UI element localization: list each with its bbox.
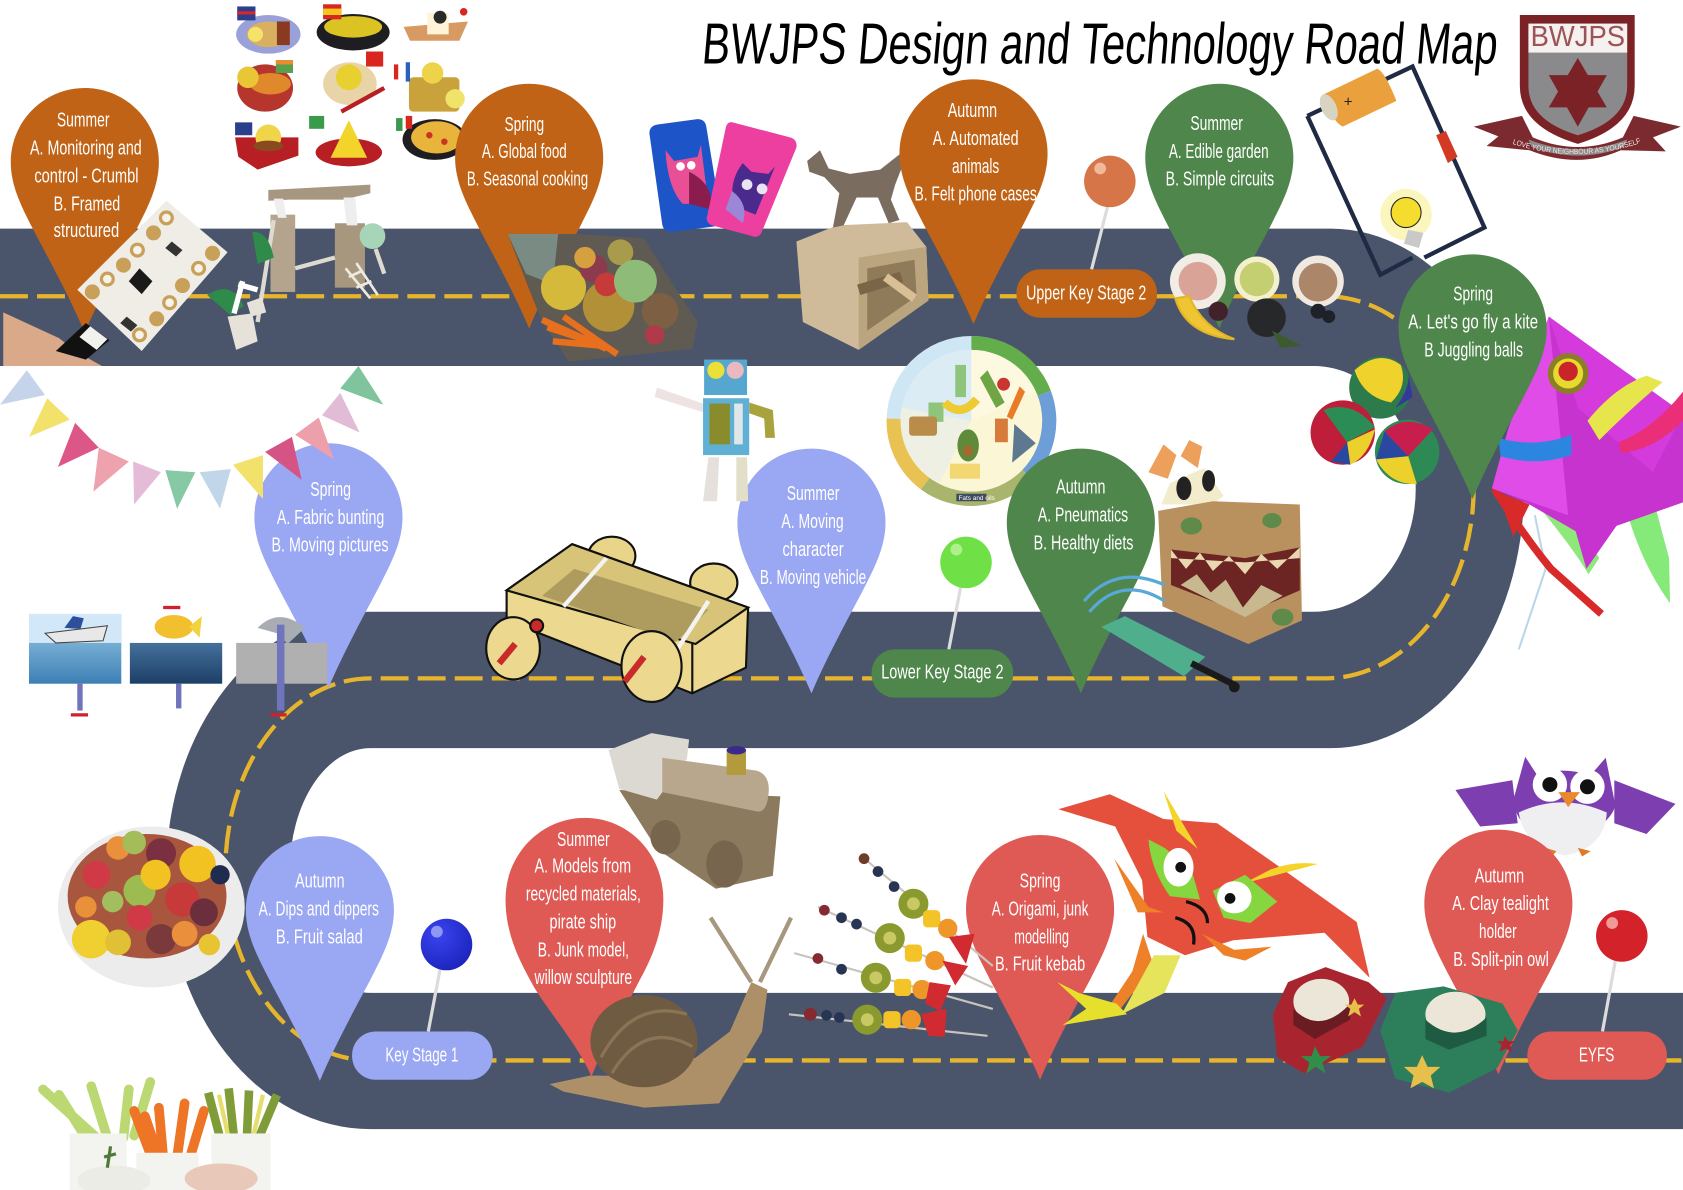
label: key stage 1: Key Stage 1 — [385, 1045, 458, 1067]
image: moving pictures panels — [29, 608, 327, 715]
skewer 1 — [859, 853, 993, 966]
image: willow snail — [550, 918, 791, 1108]
star of David — [1549, 58, 1607, 127]
logo motto: LOVE YOUR NEIGHBOUR AS YOURSELF — [1512, 138, 1640, 154]
image: crumbl board and hand — [3, 201, 228, 366]
pin: lower KS2 spring green: A. Let's go fly a kite — [1408, 311, 1538, 333]
school logo — [1474, 15, 1681, 160]
pin: EYFS spring red — [966, 835, 1114, 1080]
image: fruit bowl — [58, 826, 245, 987]
pin: upper KS2 autumn: A. Automated — [933, 128, 1019, 150]
pin: upper KS2 autumn — [899, 79, 1048, 324]
battery: + — [1344, 93, 1353, 110]
pin: upper key stage 2 — [1084, 156, 1136, 269]
pin: upper KS2 summer: Summer — [57, 110, 110, 132]
pin: lower KS2 spring green — [1399, 254, 1547, 499]
image: dips and dippers — [43, 1082, 277, 1190]
pin: upper KS2 spring: Spring — [504, 114, 544, 136]
label: upper key stage 2: Upper Key Stage 2 — [1026, 282, 1146, 304]
pin: lower KS2 spring green: Spring — [1453, 284, 1493, 306]
pin: EYFS spring red: modelling — [1014, 926, 1069, 948]
pin: KS1 summer red: willow sculpture — [534, 967, 632, 989]
image: circuit with battery and bulb — [1307, 67, 1484, 275]
pin: EYFS spring red: A. Origami, junk — [992, 899, 1089, 921]
logo wordmark: BWJPS — [1531, 21, 1625, 53]
pin: lower KS2 spring periwinkle: B. Moving pictures — [272, 535, 389, 557]
image: eatwell plate: Fats and oils — [958, 495, 995, 502]
road — [0, 229, 1683, 1129]
pin: upper KS2 summer: B. Framed — [54, 193, 120, 215]
label: key stage 1 — [352, 1031, 493, 1080]
image: treehouse model — [207, 185, 385, 350]
label: upper key stage 2 — [1016, 269, 1157, 318]
image: felt phone cases — [652, 121, 794, 235]
pin: EYFS autumn red: A. Clay tealight — [1452, 893, 1549, 915]
image: smoothies — [1170, 253, 1344, 348]
pin: upper KS2 autumn: Autumn — [948, 100, 997, 122]
pin: lower KS2 summer periwinkle — [737, 449, 886, 693]
image: moving robot — [655, 360, 775, 501]
bulb — [1380, 189, 1432, 248]
pin: lower KS2 summer periwinkle: B. Moving vehicle — [760, 567, 866, 589]
image: pneumatic pump — [1084, 577, 1240, 692]
pin: lower KS2 summer periwinkle: A. Moving — [781, 511, 844, 533]
image: global food characters — [235, 4, 468, 170]
pin: upper KS2 summer green: Summer — [1190, 113, 1243, 135]
pin: upper KS2 summer green: A. Edible garden — [1169, 141, 1269, 163]
pin: KS1 summer red: recycled materials, — [526, 884, 641, 906]
label: lower key stage 2: Lower Key Stage 2 — [881, 661, 1004, 683]
pin: KS1 summer red: Summer — [557, 829, 610, 851]
pin: lower KS2 summer periwinkle: character — [782, 539, 844, 561]
pin: lower KS2 spring periwinkle — [254, 443, 403, 688]
pin: EYFS autumn red — [1424, 830, 1572, 1074]
image: vegetable basket — [508, 234, 698, 362]
skewer 4 — [789, 1005, 987, 1037]
pin: upper KS2 autumn: animals — [952, 156, 999, 178]
image: origami dragon — [1057, 791, 1370, 1025]
panel: boat — [29, 614, 121, 715]
pin: upper KS2 spring — [455, 84, 603, 328]
pin: EYFS autumn red: Autumn — [1475, 865, 1524, 887]
pin: upper KS2 autumn: B. Felt phone cases — [914, 184, 1037, 206]
pin: KS1 summer red: B. Junk model, — [538, 939, 629, 961]
pin: upper KS2 spring: A. Global food — [482, 141, 567, 163]
pin: KS1 autumn periwinkle: Autumn — [295, 871, 345, 893]
pin: lower KS2 spring green: B Juggling balls — [1424, 339, 1523, 361]
pin: upper KS2 summer green: B. Simple circuits — [1166, 169, 1274, 191]
pin: KS1 summer red: pirate ship — [550, 911, 616, 933]
pin: upper KS2 summer: A. Monitoring and — [30, 138, 142, 160]
image: eatwell plate — [887, 336, 1056, 506]
pin: EYFS spring red: B. Fruit kebab — [995, 953, 1085, 975]
image: clay tealight holders — [1273, 967, 1518, 1093]
battery — [1316, 69, 1396, 127]
switch — [1436, 131, 1458, 163]
image: kite — [1492, 317, 1683, 649]
pin: upper KS2 summer — [11, 88, 159, 333]
pin: lower KS2 spring periwinkle: A. Fabric bunting — [277, 507, 384, 529]
pin: upper KS2 spring: B. Seasonal cooking — [467, 169, 588, 191]
pin: lower key stage 2 — [940, 537, 992, 649]
image: owl puppet — [1455, 757, 1675, 857]
pin: EYFS autumn red: holder — [1479, 921, 1517, 943]
label: lower key stage 2 — [872, 649, 1013, 698]
pin: key stage 1 — [421, 919, 472, 1031]
image: moving vehicle cart — [486, 537, 748, 702]
image: fruit kebabs — [789, 853, 993, 1037]
pin: upper KS2 summer green — [1145, 84, 1293, 328]
pin: EYFS spring red: Spring — [1020, 871, 1060, 893]
pin: upper KS2 summer: structured — [54, 220, 119, 242]
panel: shark — [236, 617, 327, 715]
pin: lower KS2 autumn green — [1007, 449, 1155, 693]
skewer 3 — [794, 953, 993, 1011]
pin: EYFS autumn red: B. Split-pin owl — [1453, 949, 1549, 971]
label: EYFS: EYFS — [1579, 1045, 1614, 1067]
pin: upper KS2 summer: control - Crumbl — [34, 165, 138, 187]
image: train model — [609, 733, 780, 889]
green tealight — [1380, 986, 1518, 1093]
panel: fish — [130, 608, 222, 708]
image: automated animal — [796, 146, 928, 350]
eatwell label — [956, 494, 986, 501]
red tealight — [1273, 967, 1387, 1073]
pin: KS1 summer red: A. Models from — [535, 856, 631, 878]
image: bunting — [0, 366, 383, 509]
image: monster box — [1148, 440, 1302, 644]
image: juggling balls — [1311, 356, 1439, 484]
skewer 2 — [818, 905, 993, 987]
pin: KS1 autumn periwinkle: A. Dips and dippers — [259, 899, 379, 921]
pin: lower KS2 summer periwinkle: Summer — [787, 483, 839, 505]
pin: lower KS2 autumn green: A. Pneumatics — [1038, 505, 1128, 527]
pin: lower KS2 spring periwinkle: Spring — [310, 479, 351, 501]
pin: KS1 summer red — [506, 818, 663, 1077]
pin: EYFS — [1596, 910, 1648, 1031]
pin: KS1 autumn periwinkle: B. Fruit salad — [276, 926, 363, 948]
pin: KS1 autumn periwinkle — [246, 836, 394, 1081]
pin: lower KS2 autumn green: B. Healthy diets — [1034, 533, 1133, 555]
pin: lower KS2 autumn green: Autumn — [1056, 477, 1106, 499]
label: EYFS — [1527, 1031, 1667, 1080]
